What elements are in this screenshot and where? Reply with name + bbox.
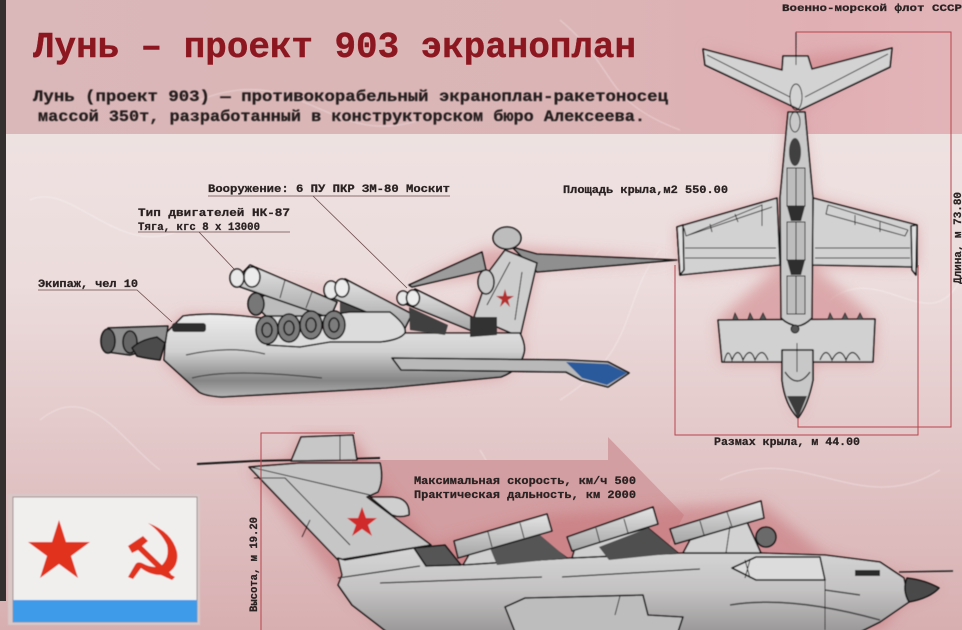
tail pods [493, 227, 521, 249]
label: speed and range [414, 476, 636, 502]
cockpit window [172, 323, 206, 332]
star on fin [347, 507, 377, 536]
fin [249, 463, 431, 560]
hull [164, 314, 524, 397]
upper pod [291, 435, 357, 461]
dimension: wingspan [675, 265, 918, 449]
intro text: массой 350т, разработанный в конструкторском бюро Алексеева. [38, 108, 645, 126]
intro text [33, 88, 669, 126]
label: crew: Экипаж, чел 10 [38, 279, 138, 291]
rear tail plane [409, 252, 486, 287]
dimension: height [249, 433, 355, 630]
dimension: length [796, 32, 962, 427]
launcher 2 [572, 528, 678, 558]
label: crew [38, 279, 172, 322]
side view aircraft, lower [197, 435, 953, 630]
nose cone [132, 337, 165, 360]
launcher 3 [683, 522, 761, 553]
label: speed and range: Практическая дальность, км 2000 [414, 490, 636, 502]
rear launcher base [414, 545, 461, 566]
launchers [255, 293, 345, 322]
flag hammer and sickle [128, 523, 177, 580]
intro text: Лунь (проект 903) — противокорабельный экраноплан-ракетоносец [33, 88, 669, 106]
top view tail [703, 48, 892, 110]
engine nacelle [732, 557, 825, 580]
top view forward planes [718, 319, 875, 362]
flag [8, 494, 200, 625]
label: speed and range: Максимальная скорость, км/ч 500 [414, 476, 636, 488]
cockpit window [855, 570, 880, 576]
title: Лунь – проект 903 экраноплан [33, 27, 636, 68]
launcher 1 [463, 535, 567, 565]
label: wing area: Площадь крыла,м2 550.00 [563, 185, 728, 197]
navy label: Военно-морской флот СССР [782, 2, 962, 15]
wing [392, 358, 629, 387]
tail side pod [370, 497, 409, 516]
side view aircraft, upper [101, 227, 677, 397]
side engines [267, 312, 405, 347]
nose cone [905, 578, 939, 602]
label: armament: Вооружение: 6 ПУ ПКР ЗМ-80 Москит [208, 184, 450, 196]
forward engines [108, 326, 168, 355]
top view wings [677, 198, 780, 275]
label: engines [138, 208, 290, 270]
top view nose [782, 350, 813, 418]
flag star [28, 520, 90, 578]
label: armament [208, 184, 450, 288]
top view fuselage [780, 112, 813, 326]
label: engines: Тяга, кгс 8 x 13000 [138, 222, 260, 234]
dimension: height: Высота, м 19.20 [249, 517, 261, 612]
hull [338, 548, 909, 630]
label: engines: Тип двигателей НК-87 [138, 208, 290, 220]
top view aircraft [677, 32, 917, 418]
fin [474, 250, 537, 337]
background arrow [352, 437, 684, 600]
star on fin [496, 289, 514, 307]
dimension: wingspan: Размах крыла, м 44.00 [714, 437, 860, 449]
flag stripe [13, 600, 197, 622]
wing [505, 595, 683, 630]
tail plate [197, 458, 380, 464]
